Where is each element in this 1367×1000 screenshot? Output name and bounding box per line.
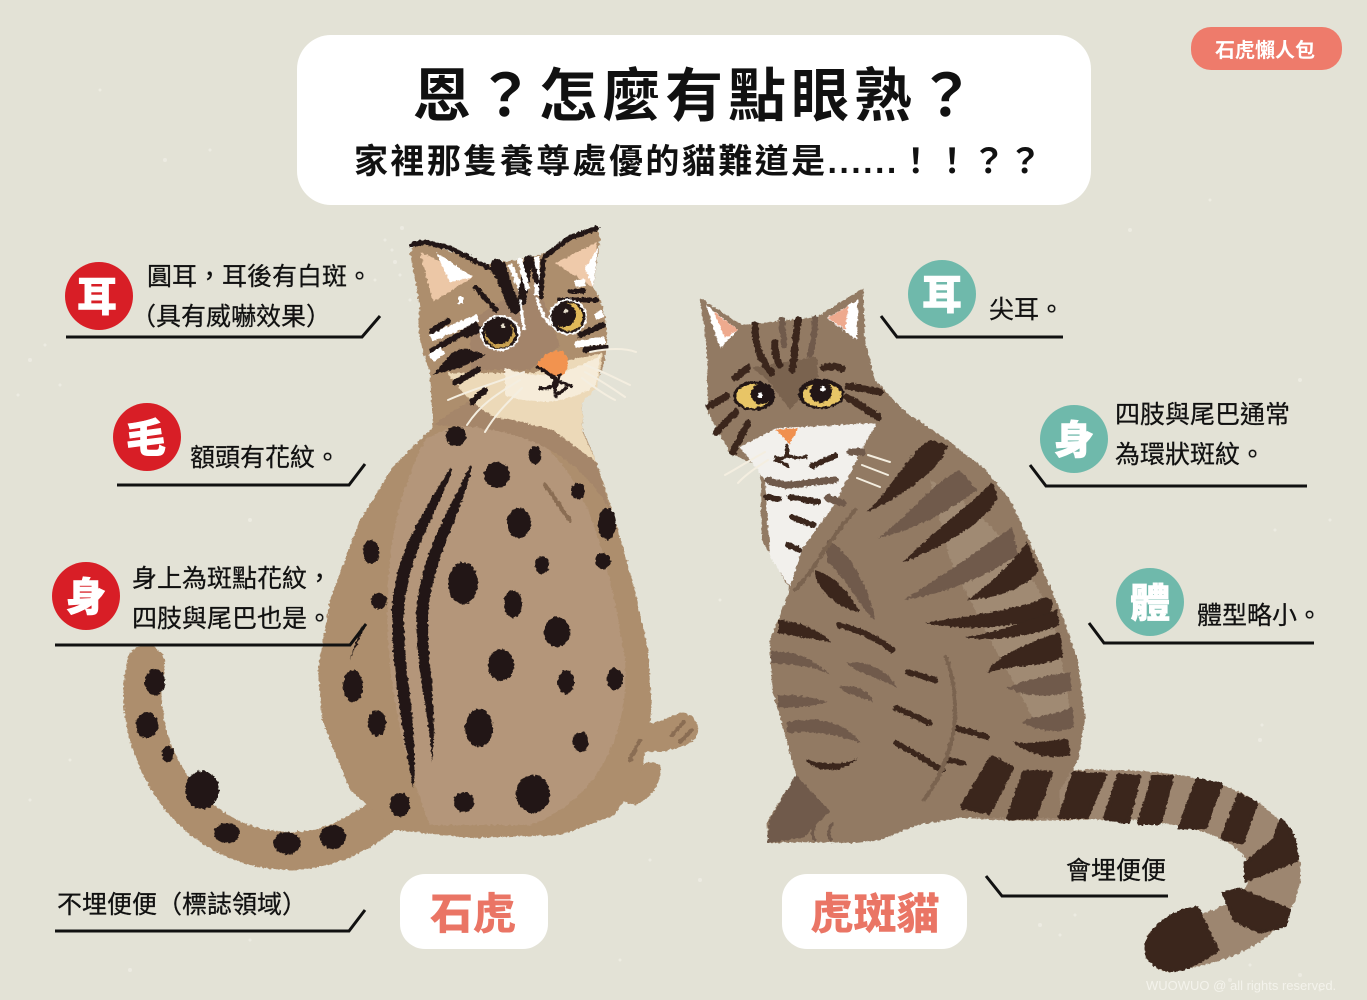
- leopard cat note: droppings: [55, 891, 365, 931]
- leopard cat face shade: [470, 290, 560, 370]
- tabby name label: [782, 874, 967, 949]
- leopard cat note: fur: 毛: [126, 417, 166, 461]
- leopard cat whiskers: [448, 349, 636, 432]
- tabby head stripes: [709, 318, 880, 452]
- leopard cat chest: [447, 353, 603, 463]
- leopard cat note: fur: 額頭有花紋。: [190, 444, 340, 472]
- leopard cat note: body: 四肢與尾巴也是。: [132, 605, 332, 633]
- subtitle: 家裡那隻養尊處優的貓難道是......！！？？: [354, 143, 1042, 181]
- tabby back light patches: [930, 480, 1072, 730]
- leopard cat leg line and paw toes: [545, 485, 692, 760]
- tabby white chest: [740, 423, 877, 587]
- tabby note: size: 體: [1130, 582, 1170, 626]
- copyright: WUOWUO @ all rights reserved.: [1146, 978, 1336, 993]
- leopard cat paws: [618, 713, 698, 805]
- leopard cat forehead and cheek markings: [431, 257, 605, 402]
- tabby body stripes: [771, 440, 1074, 770]
- tabby front paw: [767, 775, 832, 843]
- leopard cat note: ears: 耳: [77, 276, 117, 320]
- tabby note: body: [1030, 401, 1307, 486]
- leopard cat note: fur: [113, 403, 365, 485]
- leopard cat name label: [400, 874, 548, 949]
- title panel: [297, 35, 1091, 205]
- tabby note: ears: [881, 260, 1064, 337]
- leopard cat body shading: [387, 425, 626, 825]
- tabby note: droppings: [986, 857, 1168, 896]
- tabby note: body: 四肢與尾巴通常: [1115, 401, 1290, 429]
- series badge: 石虎懶人包: [1215, 39, 1315, 62]
- tabby note: ears: 尖耳。: [989, 296, 1064, 324]
- leopard cat note: body: [52, 562, 366, 645]
- leopard cat note: body: 身: [66, 576, 106, 620]
- leopard cat ears: [412, 228, 598, 302]
- main title: 恩？怎麼有點眼熟？: [413, 64, 975, 129]
- leopard cat name label: 石虎: [430, 891, 516, 939]
- tabby whiskers: [725, 452, 890, 487]
- leopard cat note: ears: [65, 262, 380, 337]
- tabby note: ears: 耳: [922, 274, 962, 318]
- leopard cat tail: [136, 664, 410, 854]
- tabby ears: [706, 300, 858, 348]
- leopard cat nose and mouth: [537, 351, 571, 396]
- leopard cat note: ears: 圓耳，耳後有白斑。: [147, 263, 372, 291]
- tabby leg outlines: [795, 510, 955, 800]
- tabby note: body: 身: [1054, 419, 1094, 463]
- tabby note: size: [1089, 568, 1322, 643]
- leopard cat body spots: [343, 426, 623, 817]
- tabby name label: 虎斑貓: [810, 891, 940, 939]
- tabby chest stripes: [766, 452, 862, 550]
- leopard cat note: droppings: 不埋便便（標誌領域）: [57, 891, 307, 919]
- leopard cat illustration: [136, 227, 698, 854]
- tabby tail rings: [962, 757, 1297, 970]
- leopard cat eyes: [480, 299, 587, 351]
- tabby nose and mouth: [775, 428, 806, 466]
- leopard cat note: body: 身上為斑點花紋，: [132, 565, 332, 593]
- series badge: [1191, 27, 1342, 70]
- tabby body and head: [700, 288, 1085, 843]
- leopard cat note: ears: （具有威嚇效果）: [131, 303, 331, 331]
- tabby note: body: 為環狀斑紋。: [1115, 441, 1265, 469]
- tabby tail: [960, 792, 1276, 947]
- tabby note: droppings: 會埋便便: [1066, 857, 1166, 885]
- leopard cat body and head: [318, 227, 652, 838]
- tabby note: size: 體型略小。: [1197, 602, 1322, 630]
- tabby cat illustration: [700, 288, 1297, 970]
- tabby face shading: [752, 357, 818, 410]
- tabby eyes: [733, 379, 844, 411]
- leopard cat back stripes: [392, 465, 472, 788]
